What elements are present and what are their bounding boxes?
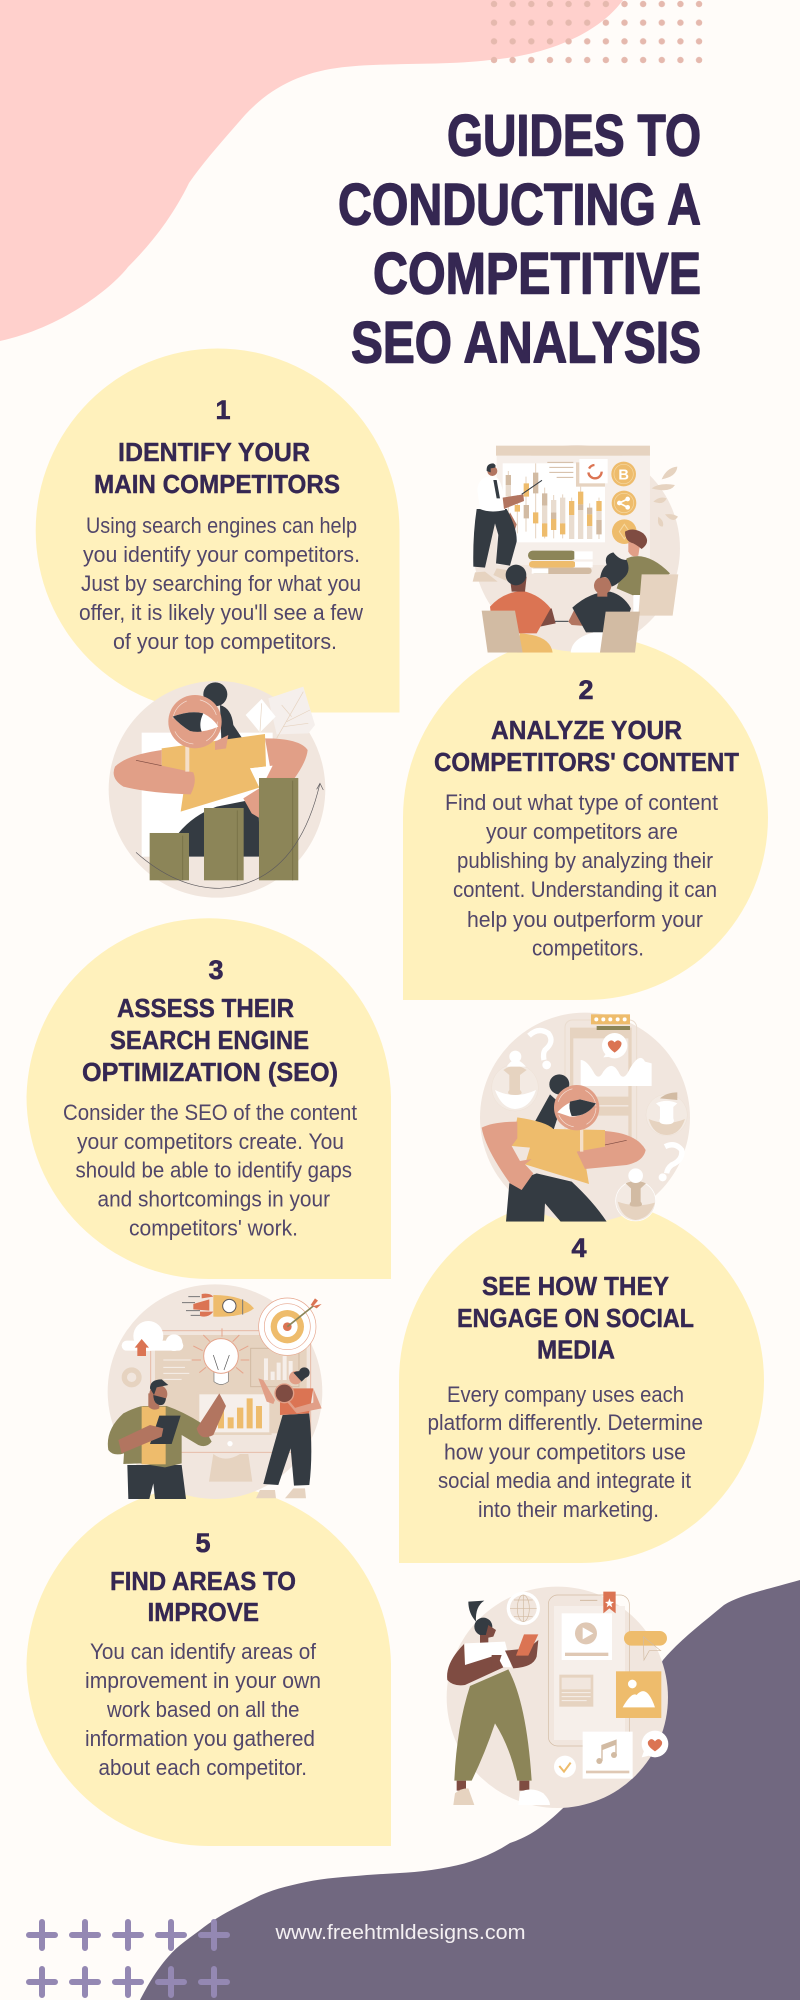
panel 3: assess SEO [26,918,391,1279]
panel 1 body text: Just by searching for what you [81,571,361,596]
panel 2 body text: competitors. [532,936,644,960]
panel 3 body text [63,1100,357,1240]
growth arrow curve [136,783,323,888]
panel 5 heading: FIND AREAS TO [110,1566,296,1596]
title: SEO ANALYSIS [351,310,701,376]
panel 2 heading: ANALYZE YOUR [491,715,682,745]
seated woman with curly hair [568,552,640,653]
panel 1 body text: you identify your competitors. [83,542,360,567]
background blob: pink top left [0,0,623,341]
video card [562,1613,612,1660]
panel 4 body text: into their marketing. [478,1497,659,1522]
panel 5: areas to improve [26,1485,391,1846]
step number 1: 1 [215,395,231,425]
panel 4 heading: SEE HOW THEY [482,1271,669,1301]
music card [583,1732,633,1779]
lightbulb [192,1328,249,1384]
panel 5 heading [110,1566,296,1627]
panel 5 body text: information you gathered [85,1726,315,1751]
rating stars bar [591,1014,630,1030]
title: CONDUCTING A [338,172,701,238]
step number 5: 5 [195,1528,211,1558]
title: GUIDES TO [447,104,701,168]
man from behind on right [617,530,678,616]
bookmark [603,1592,616,1613]
panel 3 heading [82,993,338,1087]
seated man in orange shirt [482,565,568,653]
heart speech bubble [642,1731,668,1757]
panel 4 body text: social media and integrate it [438,1468,691,1493]
crypto coins: B [618,467,629,483]
panel 2 body text: publishing by analyzing their [457,848,713,873]
title [338,104,701,376]
chart card [197,1392,272,1435]
panel 1 heading [94,437,340,499]
website url: www.freehtmldesigns.com [274,1922,526,1944]
panel 1 heading: IDENTIFY YOUR [118,437,310,467]
olive bars [150,778,298,880]
presenter [473,463,542,582]
woman with magnifier [256,1367,322,1498]
panel 1 background [36,348,399,712]
phone mockup [548,1595,629,1746]
image card [616,1671,661,1718]
panel 1 body text: Using search engines can help [86,513,357,538]
woman figure [482,1074,646,1222]
magnifying glass with eye [554,1085,599,1130]
panel 5 body text: about each competitor. [98,1755,307,1780]
panel 2 body text: content. Understanding it can [453,877,717,902]
panel 2 body text: Find out what type of content [445,790,718,815]
panel 5 body text: You can identify areas of [90,1639,317,1664]
heart speech bubble [602,1033,627,1058]
woman holding phone [447,1601,550,1805]
panel 4 body text: Every company uses each [447,1382,684,1407]
panel 4 background [399,1198,764,1563]
panel 5 body text: work based on all the [106,1697,300,1722]
panel 3 heading: OPTIMIZATION (SEO) [82,1057,338,1087]
title: COMPETITIVE [373,242,701,306]
man with tablet [108,1379,226,1499]
panel 3 background [26,918,391,1279]
magnifying glass with eye [168,695,222,772]
panel 1: identify competitors [36,348,399,712]
panel 1 body text: offer, it is likely you'll see a few [79,600,363,625]
illustration: woman with magnifier and bar chart [109,681,325,898]
illustration: woman analysing social media profiles [480,1013,690,1223]
question marks [529,1030,682,1173]
screen backdrop [151,1331,311,1452]
panel 2 body text: help you outperform your [467,907,703,932]
panel 3 body text: competitors' work. [129,1216,298,1240]
user avatars [492,1051,687,1221]
panel 3 body text: Consider the SEO of the content [63,1100,357,1125]
decorative leaves [246,687,315,738]
white area graph [581,1058,652,1086]
illustration: woman browsing mobile content [447,1587,668,1808]
panel 3 body text: should be able to identify gaps [76,1158,352,1182]
panel 1 body text [79,513,363,654]
pill button with cursor [624,1631,667,1660]
panel 4 body text: how your competitors use [444,1440,686,1464]
panel 5 heading: IMPROVE [148,1597,259,1627]
panel 2 body text: your competitors are [486,819,678,844]
panel 2 heading [434,715,739,777]
panel 4 body text [428,1382,703,1522]
illustration: two people with rocket target and lightbulb [108,1284,322,1499]
panel 4 heading [457,1271,694,1364]
panel 2 background [403,635,768,1000]
panel 5 body text: improvement in your own [85,1668,321,1693]
plus sign grid decoration [29,1922,227,1995]
monitor stand [209,1454,252,1482]
step number 3: 3 [208,955,224,985]
illustration: team meeting with chart board [473,445,680,653]
step number 2: 2 [578,675,594,705]
background blob: purple bottom right [140,1580,800,2000]
presentation board [496,446,650,565]
woman figure [114,682,308,857]
panel 5 background [26,1485,391,1846]
article card [559,1675,593,1707]
panel 4 heading: ENGAGE ON SOCIAL [457,1303,694,1333]
panel 5 body text [85,1639,321,1780]
panel 3 body text: your competitors create. You [77,1129,344,1154]
panel 2 heading: COMPETITORS' CONTENT [434,747,739,777]
phone background shapes [564,1020,637,1140]
stacked books [528,551,593,574]
panel 1 heading: MAIN COMPETITORS [94,469,340,499]
rocket [182,1294,254,1317]
panel 1 body text: of your top competitors. [113,629,337,654]
panel 2: analyze content [403,635,768,1000]
panel 4: social media [399,1198,764,1563]
step number 4: 4 [571,1233,587,1263]
panel 3 heading: SEARCH ENGINE [110,1025,309,1055]
gear icon [124,1370,139,1385]
panel 3 heading: ASSESS THEIR [117,993,294,1023]
crypto coins [611,462,637,544]
cloud with upload arrow [122,1321,183,1356]
check badge [554,1756,576,1778]
target with arrow [259,1298,322,1355]
globe icon [507,1592,540,1625]
panel 4 heading: MEDIA [537,1334,615,1364]
panel 4 body text: platform differently. Determine [428,1410,703,1435]
dot grid decoration [485,0,708,68]
decorative leaves [652,467,678,527]
panel 3 body text: and shortcomings in your [98,1186,330,1212]
panel 2 body text [445,790,718,960]
